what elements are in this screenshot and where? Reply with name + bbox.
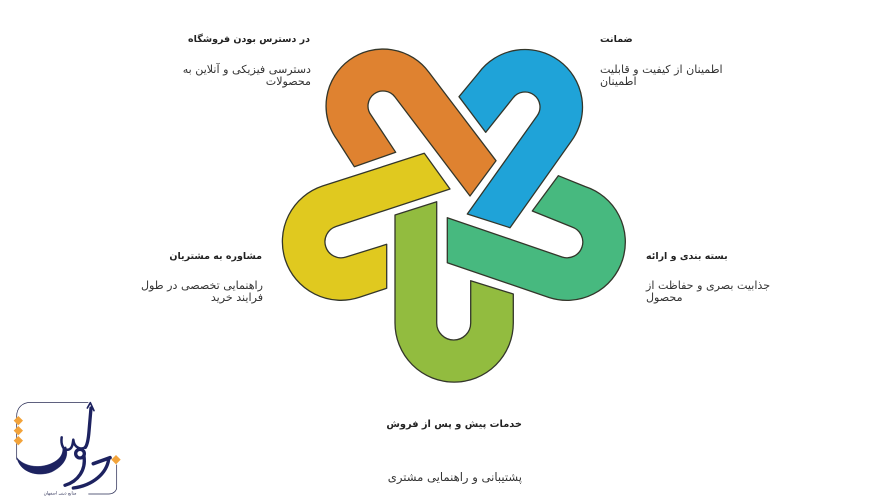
description: اطمینان — [600, 75, 637, 88]
text block: services — [386, 419, 522, 484]
heading: ضمانت — [600, 34, 633, 45]
logo diamonds — [14, 416, 121, 464]
description: محصول — [646, 291, 683, 304]
description — [141, 279, 263, 304]
logo frame — [17, 402, 117, 494]
description: جذابیت بصری و حفاظت از — [646, 279, 770, 292]
heading: بسته بندی و ارائه — [646, 251, 728, 262]
description: فرایند خرید — [211, 291, 263, 304]
band: yellow — [282, 153, 450, 300]
heading: در دسترس بودن فروشگاه — [188, 34, 310, 45]
text block: packaging — [646, 251, 770, 304]
description — [600, 63, 723, 88]
description: دسترسی فیزیکی و آنلاین به — [183, 63, 311, 76]
heading: مشاوره به مشتریان — [169, 251, 262, 262]
logo caption: منابع دینی اصفهان — [44, 492, 76, 497]
description — [183, 62, 311, 88]
description: اطمینان از کیفیت و قابلیت — [600, 63, 723, 76]
text block: customer consultation — [141, 251, 263, 304]
logo calligraphy — [17, 403, 110, 488]
band: teal — [447, 176, 625, 300]
description: راهنمایی تخصصی در طول — [141, 279, 263, 292]
logo — [14, 402, 121, 497]
band: green — [395, 202, 513, 382]
description: پشتیبانی و راهنمایی مشتری — [388, 470, 522, 484]
text block: warranty — [600, 34, 723, 88]
description — [646, 279, 770, 304]
heading: خدمات پیش و پس از فروش — [386, 419, 522, 430]
band: orange — [326, 49, 496, 196]
band: blue — [459, 50, 583, 228]
description: محصولات — [266, 75, 311, 88]
text block: store accessibility — [183, 33, 311, 88]
